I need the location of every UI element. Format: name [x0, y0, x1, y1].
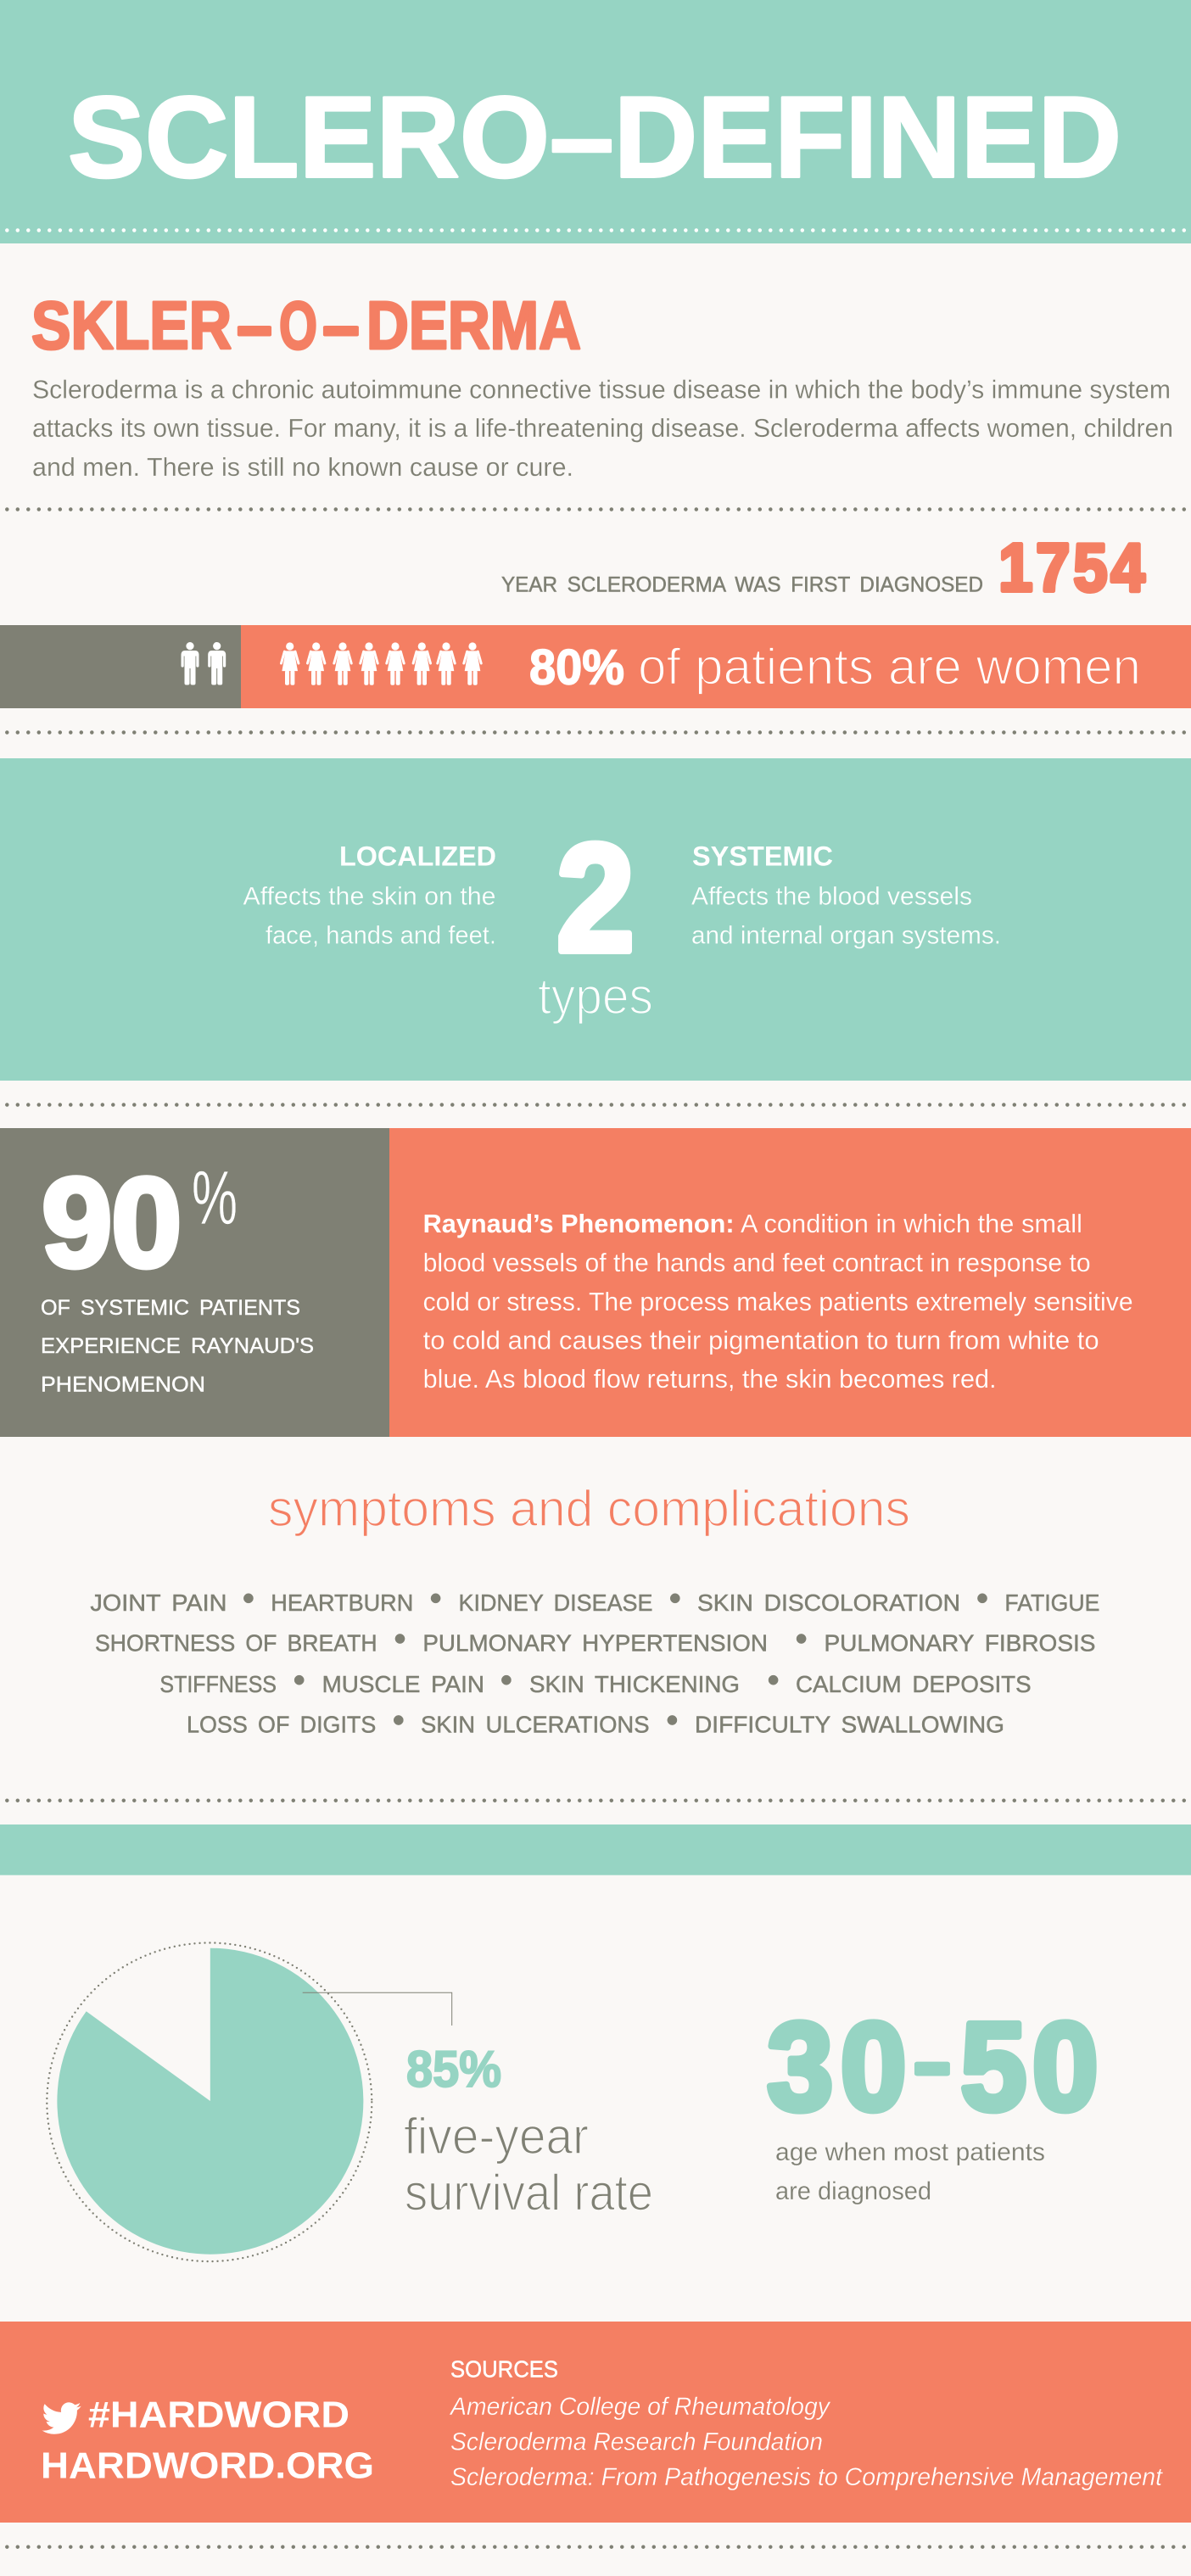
list: symptoms row 4: LOSS OF DIGITS	[187, 1712, 376, 1738]
heading: pronunciation	[31, 288, 581, 363]
list: symptoms row 2: SHORTNESS OF BREATH	[95, 1630, 377, 1657]
text: sources: American College of Rheumatology	[449, 2393, 831, 2421]
text: age when diagnosed	[775, 2138, 1045, 2205]
text: systemic: and internal organ systems.	[691, 922, 1001, 950]
text: website: HARDWORD.ORG	[41, 2445, 374, 2487]
list: symptoms row 1: JOINT PAIN	[90, 1590, 226, 1616]
stat: 30-50: -	[913, 2014, 952, 2109]
text: definition paragraph: attacks its own tissue. For many, it is a life-threatening disease. Scleroderma affects women, children	[32, 413, 1173, 443]
stat: 30-50: 30	[767, 1998, 907, 2137]
list: symptoms row 3: CALCIUM DEPOSITS	[796, 1671, 1032, 1697]
list: symptoms row 1: HEARTBURN	[271, 1590, 413, 1616]
text: age when diagnosed: age when most patients	[775, 2138, 1045, 2166]
icon: women	[282, 642, 481, 685]
list: symptoms row 4: DIFFICULTY SWALLOWING	[695, 1712, 1004, 1738]
text: sources: Scleroderma Research Foundation	[450, 2428, 823, 2456]
text: types: types	[538, 968, 653, 1025]
heading: pronunciation: -	[321, 288, 361, 363]
list: symptoms row 3: MUSCLE PAIN	[322, 1671, 484, 1697]
text: systemic	[691, 841, 1001, 950]
pie chart: 85 percent	[47, 1942, 372, 2261]
text: five-year survival rate: five-year	[404, 2108, 589, 2165]
text: Raynaud's paragraph: blue. As blood flow returns, the skin becomes red.	[423, 1364, 997, 1394]
panel: two types	[0, 758, 1191, 1081]
heading: pronunciation: DERMA	[366, 288, 581, 363]
leader line	[303, 1992, 452, 2026]
text: definition paragraph: and men. There is still no known cause or cure.	[32, 452, 573, 482]
text: systemic: SYSTEMIC	[692, 841, 833, 872]
text: five-year survival rate: survival rate	[405, 2165, 653, 2221]
panel: symptoms and complications	[90, 1480, 1099, 1738]
panel: 90 percent	[0, 1128, 389, 1437]
label: systemic patients	[41, 1296, 314, 1397]
label: systemic patients: OF SYSTEMIC PATIENTS	[41, 1296, 300, 1320]
text: Raynaud's paragraph	[423, 1209, 1133, 1394]
panel: header	[0, 0, 1191, 243]
text: Raynaud's paragraph: blood vessels of the hands and feet contract in response to	[423, 1248, 1091, 1277]
text: sources	[449, 2356, 1164, 2491]
list: symptoms row 1: SKIN DISCOLORATION	[697, 1590, 960, 1616]
text: sources: Scleroderma: From Pathogenesis to Comprehensive Management	[450, 2463, 1164, 2491]
panel: gender bar	[0, 625, 1191, 708]
text: hashtag: #HARDWORD	[88, 2394, 349, 2436]
list: symptoms row 2: PULMONARY FIBROSIS	[825, 1630, 1096, 1657]
panel: Raynaud's definition	[389, 1128, 1191, 1437]
text: localized	[243, 841, 496, 950]
text: of patients are women: of patients are women	[638, 638, 1141, 696]
stat: 30-50	[767, 1998, 1099, 2137]
text: localized: face, hands and feet.	[266, 922, 496, 950]
list: symptoms row 4: SKIN ULCERATIONS	[421, 1712, 650, 1738]
number: 2: 2	[556, 813, 635, 984]
stat: 85%: 85%	[406, 2041, 501, 2098]
text: age when diagnosed: are diagnosed	[775, 2177, 931, 2205]
list: symptoms row 2	[95, 1630, 1096, 1657]
text: Raynaud's paragraph: to cold and causes their pigmentation to turn from white to	[423, 1326, 1099, 1355]
text: sources: SOURCES	[450, 2356, 558, 2383]
list: symptoms row 1	[90, 1590, 1099, 1616]
text: Raynaud's paragraph: A condition in which the small	[741, 1209, 1082, 1238]
list: symptoms row 3	[159, 1671, 1032, 1697]
heading: pronunciation: O	[279, 288, 317, 363]
text: localized: LOCALIZED	[339, 841, 496, 872]
list: symptoms row 3: STIFFNESS	[159, 1671, 277, 1697]
stat: year first diagnosed	[501, 530, 1145, 606]
icon: men	[182, 642, 226, 685]
number: 90: 90	[42, 1151, 182, 1294]
label: year: YEAR SCLERODERMA WAS FIRST DIAGNOSED	[501, 573, 983, 597]
icon: twitter bird	[42, 2402, 81, 2434]
panel: footer	[0, 2322, 1191, 2523]
text: systemic: Affects the blood vessels	[691, 883, 972, 911]
list: symptoms row 1: FATIGUE	[1004, 1590, 1099, 1616]
text: definition paragraph: Scleroderma is a chronic autoimmune connective tissue disease in which the body’s immune system	[32, 375, 1171, 404]
heading: pronunciation: -	[235, 288, 274, 363]
text: five-year survival rate	[404, 2108, 653, 2221]
panel: survival and age	[47, 1942, 1099, 2261]
list: symptoms row 4	[187, 1712, 1004, 1738]
number: 1754: 1754	[998, 530, 1145, 606]
label: systemic patients: PHENOMENON	[41, 1373, 205, 1397]
stat: 80%: 80%	[529, 640, 624, 696]
percent sign: %	[192, 1156, 238, 1241]
heading: symptoms: symptoms and complications	[268, 1480, 910, 1537]
text: localized: Affects the skin on the	[243, 883, 495, 911]
text: Raynaud's paragraph: cold or stress. The process makes patients extremely sensitive	[423, 1287, 1133, 1316]
list: symptoms row 2: PULMONARY HYPERTENSION	[422, 1630, 768, 1657]
label: systemic patients: EXPERIENCE RAYNAUD'S	[41, 1334, 314, 1358]
stat: 30-50: 50	[960, 1998, 1099, 2137]
text: definition paragraph	[32, 375, 1173, 482]
list: symptoms row 3: SKIN THICKENING	[529, 1671, 740, 1697]
list: symptoms row 1: KIDNEY DISEASE	[458, 1590, 653, 1616]
panel: definition	[31, 288, 1173, 482]
text: Raynaud's paragraph: Raynaud’s Phenomenon:	[423, 1209, 735, 1238]
heading: pronunciation: SKLER	[31, 288, 232, 363]
title: SCLERO–DEFINED	[68, 73, 1121, 202]
